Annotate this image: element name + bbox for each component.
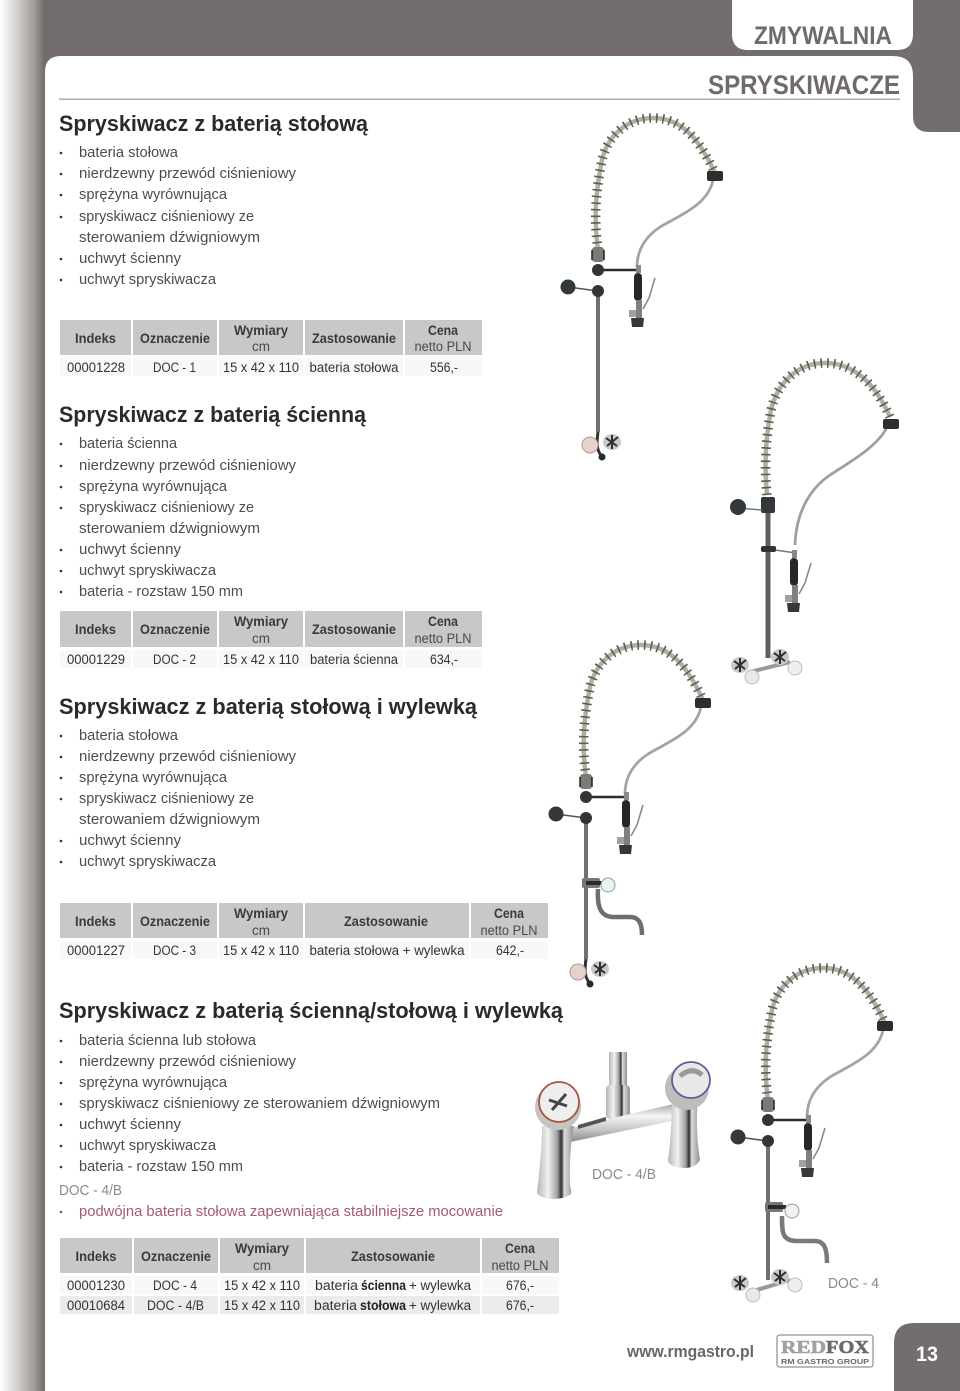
product 1: table: Wymiary bbox=[234, 323, 288, 338]
product 1: feature list bbox=[60, 144, 296, 288]
product 2: title: Spryskiwacz z baterią ścienną bbox=[59, 402, 367, 427]
product 3: feature list: sterowaniem dźwigniowym bbox=[79, 811, 260, 828]
label: DOC - 4: DOC - 4 bbox=[828, 1275, 879, 1292]
product 3: title: Spryskiwacz z baterią stołową i wylewką bbox=[59, 694, 478, 719]
page number tab bbox=[894, 1323, 960, 1391]
product 4: table: 00001230 bbox=[67, 1278, 125, 1293]
product 3: faucet photo bbox=[548, 645, 711, 988]
product 4: table: Indeks bbox=[76, 1249, 116, 1264]
product 3: feature list: uchwyt spryskiwacza bbox=[79, 853, 217, 870]
product 2: feature list: sterowaniem dźwigniowym bbox=[79, 520, 260, 537]
product 4: table: Oznaczenie bbox=[141, 1249, 211, 1264]
product 2: feature list: uchwyt spryskiwacza bbox=[79, 562, 217, 579]
logo: REDFOX: RED bbox=[781, 1337, 826, 1357]
product 1: feature list: sterowaniem dźwigniowym bbox=[79, 229, 260, 246]
product 2: table: Indeks bbox=[75, 622, 116, 637]
product 4: table: bateria bbox=[315, 1278, 359, 1293]
product 4: table: ścienna bbox=[361, 1278, 406, 1293]
product 1: table: cm bbox=[252, 339, 270, 354]
product 2: feature list: spryskiwacz ciśnieniowy ze bbox=[79, 499, 254, 516]
product 4: feature list: uchwyt ścienny bbox=[79, 1116, 181, 1133]
product 1: table: 556,- bbox=[430, 360, 458, 375]
product 3: feature list bbox=[60, 727, 296, 870]
product 2: table: 634,- bbox=[430, 652, 458, 667]
product 3: feature list: sprężyna wyrównująca bbox=[79, 769, 228, 786]
product 2: feature list: uchwyt ścienny bbox=[79, 541, 181, 558]
product 3: table: 00001227 bbox=[67, 943, 125, 958]
product 2: table: Cena bbox=[428, 614, 458, 629]
product 2: table: Oznaczenie bbox=[140, 622, 210, 637]
product 4: table: cm bbox=[253, 1258, 271, 1273]
product 2: table: Wymiary bbox=[234, 614, 288, 629]
product 1: table: Indeks bbox=[75, 331, 116, 346]
product 1: table: Cena bbox=[428, 323, 458, 338]
product 4: title: Spryskiwacz z baterią ścienną/stołową i wylewką bbox=[59, 998, 564, 1023]
product 2: feature list: nierdzewny przewód ciśnieniowy bbox=[79, 457, 296, 474]
label: DOC - 4/B: DOC - 4/B bbox=[592, 1166, 656, 1183]
product 3: table: Wymiary bbox=[234, 906, 288, 921]
product 1: feature list: sprężyna wyrównująca bbox=[79, 186, 228, 203]
product 3: table: Indeks bbox=[75, 914, 116, 929]
product 4: feature list: uchwyt spryskiwacza bbox=[79, 1137, 217, 1154]
product 4: table: + wylewka bbox=[409, 1278, 471, 1293]
product 3: table: netto PLN bbox=[480, 923, 538, 938]
product 1: table: Oznaczenie bbox=[140, 331, 210, 346]
product 1: table: bateria stołowa bbox=[310, 360, 399, 375]
page number tab: 13 bbox=[916, 1343, 938, 1366]
product 3: feature list: spryskiwacz ciśnieniowy ze bbox=[79, 790, 254, 807]
product 2: feature list: sprężyna wyrównująca bbox=[79, 478, 228, 495]
product 4: table: 15 x 42 x 110 bbox=[224, 1278, 300, 1293]
product 4: faucet photo DOC-4 bbox=[730, 968, 893, 1302]
product 4: feature list: bateria - rozstaw 150 mm bbox=[79, 1158, 243, 1175]
product 3: table: cm bbox=[252, 923, 270, 938]
product 4: table: Wymiary bbox=[235, 1241, 289, 1256]
product 2: table: 00001229 bbox=[67, 652, 125, 667]
product 1: feature list: uchwyt spryskiwacza bbox=[79, 271, 217, 288]
product 1: title: Spryskiwacz z baterią stołową bbox=[59, 111, 369, 136]
product 2: table: bateria ścienna bbox=[310, 652, 398, 667]
product 4: table: Zastosowanie bbox=[351, 1249, 435, 1264]
logo: REDFOX: RM GASTRO GROUP bbox=[781, 1357, 869, 1366]
heading rule bbox=[59, 98, 900, 100]
product 3: table: DOC - 3 bbox=[153, 943, 196, 958]
product 4: table: Cena bbox=[505, 1241, 535, 1256]
product 4: double tap photo DOC-4/B bbox=[535, 1052, 710, 1199]
product 4: feature list: nierdzewny przewód ciśnieniowy bbox=[79, 1053, 296, 1070]
product 4: feature list: DOC - 4/B bbox=[59, 1182, 122, 1199]
product 1: table: netto PLN bbox=[414, 339, 472, 354]
product 1: table: DOC - 1 bbox=[153, 360, 196, 375]
product 4: table: DOC - 4/B bbox=[147, 1298, 204, 1313]
product 4: table: 676,- bbox=[506, 1278, 534, 1293]
website address: www.rmgastro.pl bbox=[626, 1342, 754, 1361]
product 1: table: 00001228 bbox=[67, 360, 125, 375]
product 4: table: + wylewka bbox=[409, 1298, 471, 1313]
product 2: faucet photo bbox=[730, 363, 899, 684]
product 1: faucet photo bbox=[560, 118, 723, 460]
product 4: feature list: spryskiwacz ciśnieniowy ze sterowaniem dźwigniowym bbox=[79, 1095, 440, 1112]
product 3: feature list: uchwyt ścienny bbox=[79, 832, 181, 849]
product 1: table bbox=[60, 320, 482, 376]
product 1: feature list: nierdzewny przewód ciśnieniowy bbox=[79, 165, 296, 182]
product 1: table: Zastosowanie bbox=[312, 331, 396, 346]
product 2: feature list bbox=[60, 435, 296, 600]
product 3: table bbox=[60, 903, 548, 959]
product 2: feature list: bateria ścienna bbox=[79, 435, 178, 452]
product 4: feature list: sprężyna wyrównująca bbox=[79, 1074, 228, 1091]
product 3: table: Cena bbox=[494, 906, 524, 921]
product 4: table: 15 x 42 x 110 bbox=[224, 1298, 300, 1313]
product 3: table: Zastosowanie bbox=[344, 914, 428, 929]
product 4: table: netto PLN bbox=[492, 1258, 548, 1273]
product 1: feature list: uchwyt ścienny bbox=[79, 250, 181, 267]
product 2: table: DOC - 2 bbox=[153, 652, 196, 667]
logo: REDFOX bbox=[777, 1335, 873, 1367]
product 3: table: 642,- bbox=[496, 943, 524, 958]
product 2: table: Zastosowanie bbox=[312, 622, 396, 637]
product 1: feature list: bateria stołowa bbox=[79, 144, 179, 161]
product 3: table: bateria stołowa + wylewka bbox=[310, 943, 465, 958]
product 3: feature list: bateria stołowa bbox=[79, 727, 179, 744]
product 2: table: cm bbox=[252, 631, 270, 646]
product 1: table: 15 x 42 x 110 bbox=[223, 360, 299, 375]
product 2: table: netto PLN bbox=[414, 631, 472, 646]
product 4: table: 676,- bbox=[506, 1298, 534, 1313]
section tab: ZMYWALNIA: ZMYWALNIA bbox=[754, 22, 892, 50]
product 4: table bbox=[60, 1238, 559, 1314]
product 4: table: stołowa bbox=[360, 1298, 406, 1313]
product 2: feature list: bateria - rozstaw 150 mm bbox=[79, 583, 243, 600]
product 2: table: 15 x 42 x 110 bbox=[223, 652, 299, 667]
product 4: table: bateria bbox=[314, 1298, 358, 1313]
product 4: table: 00010684 bbox=[67, 1298, 125, 1313]
product 2: table bbox=[60, 611, 482, 668]
heading: SPRYSKIWACZE: SPRYSKIWACZE bbox=[708, 70, 900, 100]
product 3: table: Oznaczenie bbox=[140, 914, 210, 929]
product 4: feature list bbox=[59, 1032, 503, 1220]
product 1: feature list: spryskiwacz ciśnieniowy ze bbox=[79, 208, 254, 225]
product 4: feature list: podwójna bateria stołowa zapewniająca stabilniejsze mocowanie bbox=[79, 1203, 503, 1220]
product 4: feature list: bateria ścienna lub stołowa bbox=[79, 1032, 257, 1049]
product 3: feature list: nierdzewny przewód ciśnieniowy bbox=[79, 748, 296, 765]
product 3: table: 15 x 42 x 110 bbox=[223, 943, 299, 958]
product 4: table: DOC - 4 bbox=[153, 1278, 197, 1293]
logo: REDFOX: FOX bbox=[826, 1337, 869, 1357]
